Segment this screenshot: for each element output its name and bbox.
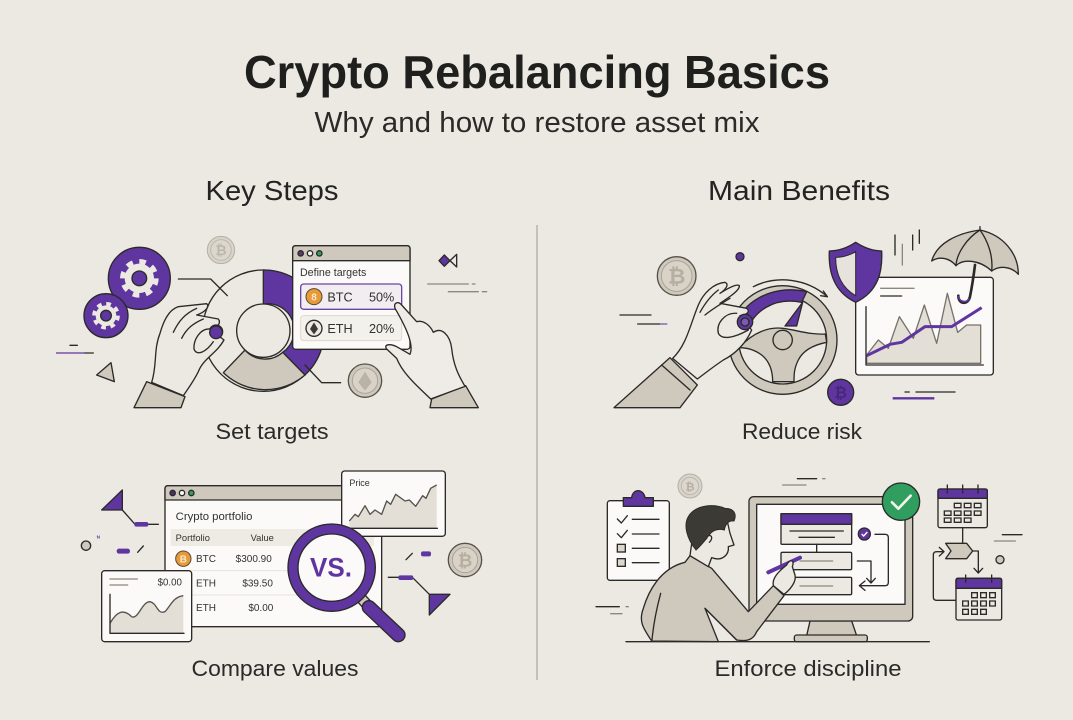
- decorative marks left: N: [97, 534, 101, 539]
- card: price chart: [342, 471, 445, 536]
- window: define targets: ETH: [327, 322, 353, 336]
- window: crypto portfolio: Value: [251, 533, 274, 543]
- window: crypto portfolio: $0.00: [248, 603, 274, 614]
- icon: bitcoin coin: [448, 543, 482, 577]
- window: define targets: 50%: [369, 290, 394, 304]
- icon: right hand pointing: [386, 303, 478, 408]
- icon: purple bitcoin coin: ₿: [834, 385, 847, 402]
- icon: clipboard checklist: [607, 491, 669, 580]
- window: define targets: 20%: [369, 322, 394, 336]
- icon: hand on dial: [614, 282, 753, 408]
- panel: compare values illustration: [81, 471, 482, 642]
- icon: magnifying glass with VS.: [293, 529, 398, 635]
- card: price chart: Price: [349, 478, 370, 488]
- window: define targets: BTC: [327, 290, 353, 304]
- window: define targets: [293, 246, 410, 349]
- icon: left hand pinching dial: [134, 304, 224, 408]
- rain lines: [895, 230, 919, 265]
- window: crypto portfolio: B: [180, 554, 187, 565]
- panel: set targets illustration: [56, 236, 487, 408]
- card: risk chart: [856, 277, 993, 375]
- card: value chart: $0.00: [158, 578, 182, 589]
- window: crypto portfolio: ETH: [196, 603, 216, 614]
- icon: faded bitcoin coin: [207, 236, 235, 264]
- caption: reduce risk: Reduce risk: [742, 419, 863, 444]
- heading: main benefits: Main Benefits: [708, 175, 890, 206]
- window: crypto portfolio: BTC: [196, 554, 216, 565]
- subtitle: Why and how to restore asset mix: [314, 107, 760, 139]
- icon: monitor: [749, 497, 913, 642]
- icon: faded coin: ₿: [685, 481, 695, 493]
- icon: faded coin: [678, 474, 702, 498]
- window: crypto portfolio: $39.50: [242, 579, 273, 590]
- decorative marks: [56, 254, 487, 382]
- decorative lines: [620, 315, 955, 398]
- window: define targets: 8: [311, 292, 317, 303]
- icon: bitcoin coin: ₿: [458, 550, 472, 570]
- figure: man pointing at monitor: [641, 506, 800, 642]
- decorative lines: [596, 479, 1022, 614]
- window: crypto portfolio: Crypto portfolio: [176, 511, 252, 523]
- icon: process flow connector: [933, 528, 983, 600]
- icon: shield: [829, 242, 882, 302]
- card: value chart: [102, 571, 192, 642]
- icon: green check badge: [882, 483, 920, 520]
- heading: key steps: Key Steps: [206, 175, 338, 206]
- decorative marks right: [388, 551, 450, 615]
- icon: bitcoin coin: ₿: [668, 265, 685, 289]
- donut chart: [178, 270, 341, 391]
- flowchart on screen: [781, 514, 888, 595]
- icon: large gear: [108, 247, 170, 309]
- icon: ethereum coin: [348, 364, 382, 397]
- window: crypto portfolio: [165, 486, 382, 627]
- icon: purple bitcoin coin: [828, 379, 854, 405]
- icon: top calendar: [938, 485, 987, 528]
- window: crypto portfolio: Portfolio: [176, 533, 210, 543]
- window: define targets: Define targets: [300, 267, 366, 279]
- window: crypto portfolio: ETH: [196, 579, 216, 590]
- icon: umbrella: [932, 227, 1018, 303]
- icon: magnifying glass with VS.: VS.: [310, 552, 352, 582]
- window: crypto portfolio: $300.90: [236, 554, 272, 565]
- caption: set targets: Set targets: [216, 419, 328, 444]
- icon: faded bitcoin coin: ₿: [215, 242, 227, 258]
- title: Crypto Rebalancing Basics: [244, 46, 830, 98]
- icon: bitcoin coin: [657, 257, 696, 295]
- icon: steering wheel: [728, 280, 837, 394]
- icon: bottom calendar: [956, 575, 1002, 620]
- icon: small gear: [84, 294, 128, 338]
- panel: enforce discipline illustration: [596, 474, 1022, 642]
- decorative dot: [736, 253, 744, 261]
- caption: enforce discipline: Enforce discipline: [714, 656, 902, 681]
- caption: compare values: Compare values: [192, 656, 358, 681]
- floor line: [626, 640, 929, 644]
- decorative marks left: [81, 490, 158, 554]
- panel: reduce risk illustration: [614, 227, 1018, 408]
